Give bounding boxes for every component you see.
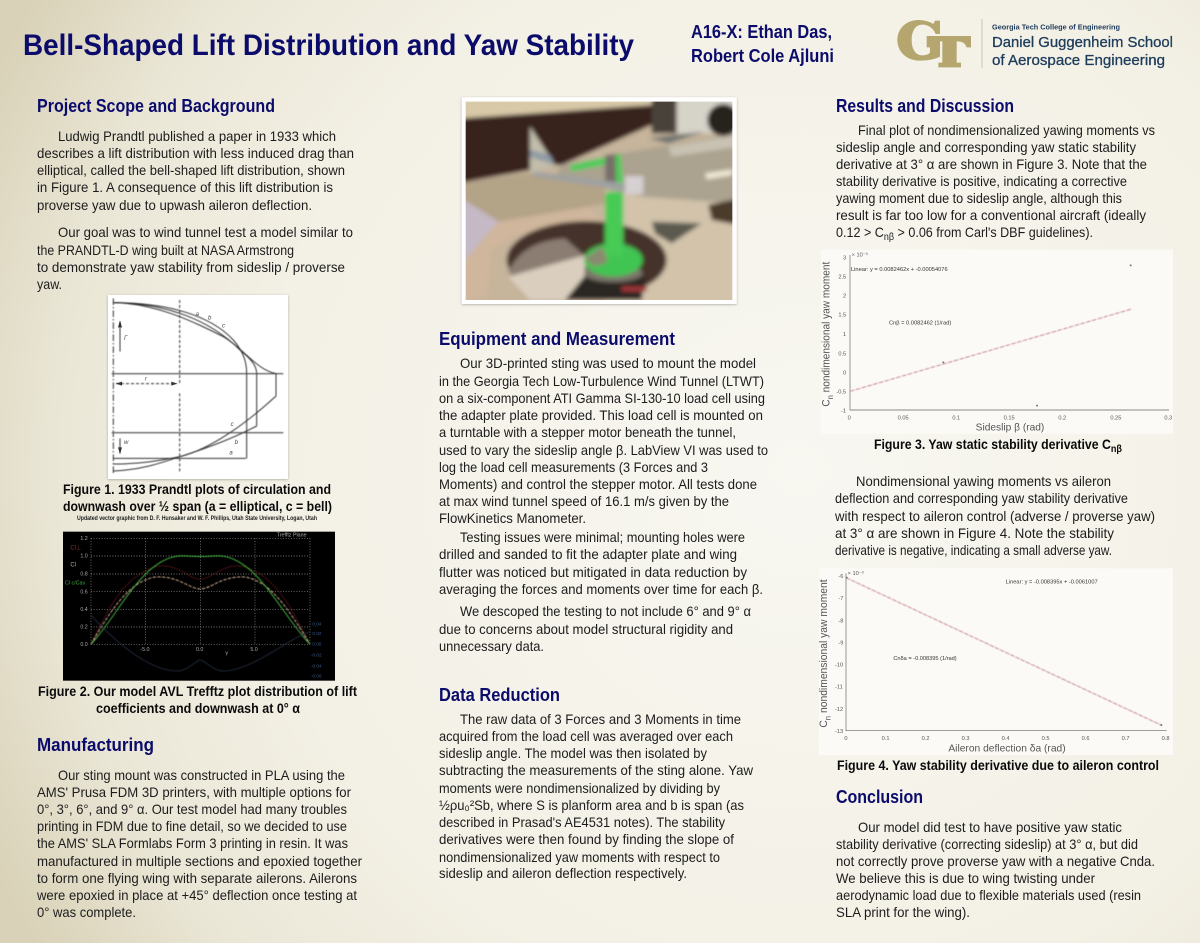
text block: aileron discussion: deflection and corresponding yaw stability derivative	[835, 490, 1128, 506]
figure 2: AVL Trefftz plot: 0.0	[80, 642, 88, 648]
chart: figure 4 yaw moment vs aileron deflection: -7	[838, 596, 843, 602]
text block: data reduction: sideslip angle. The model was then isolated by	[439, 745, 707, 761]
text block: manufacturing: Our sting mount was constructed in PLA using the	[58, 767, 345, 783]
logo: Georgia Tech Daniel Guggenheim School of Aerospace Engineering: Daniel Guggenheim School	[992, 34, 1173, 51]
figure 2: AVL Trefftz plot: 0.04	[312, 621, 322, 626]
text block: results and discussion: 0.12 > C	[836, 224, 889, 240]
heading: Results and Discussion: Results and Discussion	[836, 96, 1014, 116]
figure 2: AVL Trefftz plot: 0.4	[80, 607, 88, 613]
text block: project scope: in Figure 1. A consequence of this lift distribution is	[37, 179, 333, 195]
text block: aileron discussion	[834, 473, 1155, 558]
text block: data reduction: subtracting the measurements of the sting alone. Yaw	[439, 762, 754, 778]
text block: aileron discussion: derivative is negative, indicating a small adverse yaw.	[835, 542, 1112, 558]
title: Bell-Shaped Lift Distribution and Yaw Stability	[23, 29, 634, 62]
figure 1: Prandtl circulation and downwash plots: c	[231, 422, 234, 428]
text block: aileron discussion: Nondimensional yawing moments vs aileron	[856, 473, 1111, 489]
chart: figure 4 yaw moment vs aileron deflection: 0.2	[922, 736, 930, 742]
text block: project scope	[37, 128, 354, 292]
chart: figure 4 yaw moment vs aileron deflection: n	[823, 716, 832, 720]
text block: equipment and measurement: the adapter plate provided. This load cell is mounted on	[439, 407, 763, 423]
chart: figure 3 yaw moment vs sideslip: Sideslip β (rad)	[976, 422, 1044, 433]
figure 2: AVL Trefftz plot: -0.06	[311, 674, 322, 679]
logo: Georgia Tech Daniel Guggenheim School of Aerospace Engineering	[897, 19, 1173, 69]
text block: results and discussion: > 0.06 from Carl's DBF guidelines).	[894, 224, 1093, 240]
text block: results and discussion: derivative at 3° α are shown in Figure 3. Note that the	[836, 156, 1147, 172]
chart: figure 3 yaw moment vs sideslip: × 10⁻³	[852, 252, 868, 258]
text block: equipment and measurement: drilled and sanded to fit the adapter plate and wing	[439, 546, 737, 562]
caption: figure 2	[38, 684, 357, 716]
photo: wind tunnel model on green sting	[462, 97, 739, 305]
figure 2: AVL Trefftz plot: -0.04	[311, 663, 322, 668]
figure 2: AVL Trefftz plot: 1.0	[80, 554, 88, 560]
text block: conclusion: We believe this is due to wing twisting under	[836, 870, 1095, 886]
chart: figure 3 yaw moment vs sideslip: 1.5	[838, 313, 846, 319]
chart: figure 3 yaw moment vs sideslip: Cnβ = 0.0082462 (1/rad)	[889, 320, 952, 326]
text block: equipment and measurement: Moments) and control the stepper motor. All tests done	[439, 476, 757, 492]
figure 2: AVL Trefftz plot: -0.02	[311, 652, 322, 657]
chart: figure 3 yaw moment vs sideslip: 0.3	[1164, 416, 1172, 422]
chart: figure 4 yaw moment vs aileron deflection: Linear: y = -0.008395x + -0.0061007	[1006, 580, 1098, 586]
figure 2: AVL Trefftz plot: 1.2	[80, 536, 88, 542]
text block: results and discussion: nβ	[884, 232, 894, 243]
text block: equipment and measurement: averaging the forces and moments over time for each β.	[439, 581, 763, 597]
text block: project scope: yaw.	[37, 276, 62, 292]
chart: figure 4 yaw moment vs aileron deflection: 0.4	[1002, 736, 1010, 742]
chart: figure 4 yaw moment vs aileron deflection: 0.3	[962, 736, 970, 742]
text block: manufacturing: to form one flying wing with separate ailerons. Ailerons	[37, 870, 357, 886]
chart: figure 4 yaw moment vs aileron deflection: Aileron deflection δa (rad)	[948, 744, 1066, 755]
caption: figure 2: Figure 2. Our model AVL Trefftz plot distribution of lift	[38, 684, 357, 699]
caption: figure 3: Figure 3. Yaw static stability derivative C	[874, 437, 1134, 452]
text block: data reduction: sideslip and aileron deflection respectively.	[439, 865, 687, 881]
text block: data reduction: moments were nondimensionalized by dividing by	[439, 780, 720, 796]
figure 1: Prandtl circulation and downwash plots: r	[145, 377, 148, 383]
text block: results and discussion: result is far too low for a conventional aircraft (ideally	[836, 207, 1146, 223]
chart: figure 3 yaw moment vs sideslip	[821, 250, 1173, 434]
chart: figure 3 yaw moment vs sideslip: 0.5	[838, 351, 846, 357]
figure 2: AVL Trefftz plot	[63, 532, 335, 681]
text block: equipment and measurement: flutter was noticed but mitigated in data reduction by	[439, 564, 747, 580]
figure 1: Prandtl circulation and downwash plots: b	[235, 440, 239, 446]
chart: figure 4 yaw moment vs aileron deflection: 0.7	[1122, 736, 1130, 742]
authors	[691, 22, 834, 66]
figure 2: AVL Trefftz plot: Cl⊥	[70, 545, 81, 552]
text block: results and discussion: sideslip angle and corresponding yaw static stability	[836, 139, 1136, 155]
figure 2: AVL Trefftz plot: -5.0	[140, 647, 150, 653]
figure 1: Prandtl circulation and downwash plots: c	[222, 323, 225, 329]
text block: project scope: the PRANDTL-D wing built at NASA Armstrong	[37, 242, 294, 258]
chart: figure 3 yaw moment vs sideslip: -0.5	[836, 389, 846, 395]
figure 2: AVL Trefftz plot: 0.8	[80, 572, 88, 578]
text block: project scope: to demonstrate yaw stability from sideslip / proverse	[37, 259, 345, 275]
chart: figure 3 yaw moment vs sideslip: 0	[848, 416, 851, 422]
authors: A16-X: Ethan Das,	[691, 22, 832, 42]
text block: conclusion: SLA print for the wing).	[836, 904, 970, 920]
chart: figure 4 yaw moment vs aileron deflection: -11	[835, 685, 843, 691]
text block: project scope: describes a lift distribution with less induced drag than	[37, 145, 354, 161]
chart: figure 4 yaw moment vs aileron deflection: C	[818, 720, 830, 728]
chart: figure 4 yaw moment vs aileron deflection: Cnδa = -0.008395 (1/rad)	[893, 656, 957, 662]
figure 1: Prandtl circulation and downwash plots: Γ	[124, 336, 128, 342]
heading: Conclusion: Conclusion	[836, 787, 923, 807]
text block: equipment and measurement: due to concerns about model structural rigidity and	[439, 621, 733, 637]
chart: figure 4 yaw moment vs aileron deflection: -10	[835, 663, 843, 669]
authors: Robert Cole Ajluni	[691, 46, 834, 66]
logo: Georgia Tech Daniel Guggenheim School of Aerospace Engineering: Georgia Tech College of Engineering	[992, 22, 1120, 32]
text block: results and discussion: stability derivative is positive, indicating a corrective	[836, 173, 1127, 189]
text block: equipment and measurement: a turntable with a stepper motor beneath the tunnel,	[439, 424, 736, 440]
figure 1: Prandtl circulation and downwash plots: a	[229, 451, 233, 457]
figure 2: AVL Trefftz plot: Y	[225, 652, 229, 658]
icon: GT monogram	[897, 20, 971, 67]
text block: manufacturing: printing in FDM due to fine detail, so we decided to use	[37, 818, 347, 834]
text block: equipment and measurement: Our 3D-printed sting was used to mount the model	[460, 355, 756, 371]
text block: data reduction: described in Prasad's AE4531 notes). The stability	[439, 814, 725, 830]
chart: figure 4 yaw moment vs aileron deflection: -8	[838, 618, 843, 624]
text block: results and discussion	[836, 122, 1155, 243]
text block: conclusion	[836, 819, 1155, 920]
text block: data reduction: derivatives were then found by finding the slope of	[439, 831, 734, 847]
chart: figure 3 yaw moment vs sideslip: C	[821, 399, 833, 407]
text block: aileron discussion: at 3° α are shown in Figure 4. Note the stability	[835, 525, 1114, 541]
caption: figure 4: Figure 4. Yaw stability derivative due to aileron control	[837, 758, 1159, 773]
text block: equipment and measurement: Testing issues were minimal; mounting holes were	[460, 529, 745, 545]
chart: figure 4 yaw moment vs aileron deflection: -9	[838, 640, 843, 646]
text block: equipment and measurement: unnecessary data.	[439, 638, 544, 654]
text block: equipment and measurement: in the Georgia Tech Low-Turbulence Wind Tunnel (LTWT)	[439, 373, 764, 389]
caption: figure 1: Figure 1. 1933 Prandtl plots of circulation and	[63, 482, 331, 497]
chart: figure 3 yaw moment vs sideslip: 2	[843, 293, 846, 299]
text block: manufacturing: were epoxied in place at +45° deflection once testing at	[36, 887, 357, 903]
figure 1: Prandtl circulation and downwash plots: a	[196, 312, 200, 318]
figure 2: AVL Trefftz plot: 5.0	[250, 647, 258, 653]
figure 1: Prandtl circulation and downwash plots	[108, 295, 288, 479]
chart: figure 3 yaw moment vs sideslip: 1	[843, 332, 846, 338]
chart: figure 4 yaw moment vs aileron deflection: 0.1	[882, 736, 890, 742]
caption: figure 1: Updated vector graphic from D. F. Hunsaker and W. F. Phillips, Utah State University, Logan, Utah	[77, 516, 317, 522]
text block: data reduction: acquired from the load cell was averaged over each	[439, 728, 733, 744]
chart: figure 4 yaw moment vs aileron deflection: 0.8	[1162, 736, 1170, 742]
chart: figure 3 yaw moment vs sideslip: 0.2	[1058, 416, 1066, 422]
text block: conclusion: Our model did test to have positive yaw static	[858, 819, 1122, 835]
text block: data reduction: ½ρu₀²Sb, where S is planform area and b is span (as	[439, 797, 744, 813]
text block: data reduction: The raw data of 3 Forces and 3 Moments in time	[460, 711, 741, 727]
chart: figure 3 yaw moment vs sideslip: 0	[843, 370, 846, 376]
caption: figure 2: coefficients and downwash at 0° α	[96, 701, 301, 716]
figure 2: AVL Trefftz plot: 0.2	[80, 625, 88, 631]
text block: manufacturing	[36, 767, 362, 920]
chart: figure 4 yaw moment vs aileron deflection: 0	[844, 736, 847, 742]
chart: figure 3 yaw moment vs sideslip: -1	[841, 408, 846, 414]
heading: Equipment and Measurement: Equipment and Measurement	[439, 329, 675, 349]
text block: manufacturing: the AMS' SLA Formlabs Form 3 printing in resin. It was	[37, 835, 348, 851]
logo: Georgia Tech Daniel Guggenheim School of Aerospace Engineering: of Aerospace Engineering	[992, 52, 1165, 69]
chart: figure 3 yaw moment vs sideslip: 0.05	[898, 416, 909, 422]
text block: results and discussion: Final plot of nondimensionalized yawing moments vs	[858, 122, 1155, 138]
text block: equipment and measurement: on a six-component ATI Gamma SI-130-10 load cell using	[439, 390, 765, 406]
text block: project scope: Our goal was to wind tunnel test a model similar to	[58, 224, 353, 240]
chart: figure 4 yaw moment vs aileron deflection: 0.6	[1082, 736, 1090, 742]
figure 2: AVL Trefftz plot: 0.00	[312, 642, 322, 647]
caption: figure 1	[63, 482, 332, 522]
heading: Manufacturing: Manufacturing	[37, 735, 154, 755]
heading: Project Scope and Background: Project Scope and Background	[37, 96, 275, 116]
chart: figure 4 yaw moment vs aileron deflection: -6	[838, 574, 843, 580]
heading: Data Reduction: Data Reduction	[439, 685, 560, 705]
text block: equipment and measurement	[439, 355, 768, 654]
text block: aileron discussion: with respect to aileron control (adverse / proverse yaw)	[834, 508, 1155, 524]
figure 2: AVL Trefftz plot: Trefftz Plane	[277, 532, 307, 538]
text block: equipment and measurement: FlowKinetics Manometer.	[439, 510, 586, 526]
text block: manufacturing: 0°, 3°, 6°, and 9° α. Our test model had many troubles	[37, 801, 347, 817]
text block: conclusion: aerodynamic load due to flexible materials used (resin	[836, 887, 1141, 903]
chart: figure 3 yaw moment vs sideslip: 3	[843, 255, 846, 261]
chart: figure 4 yaw moment vs aileron deflection: 0.5	[1042, 736, 1050, 742]
text block: project scope: Ludwig Prandtl published a paper in 1933 which	[58, 128, 336, 144]
figure 2: AVL Trefftz plot: 0.6	[80, 589, 88, 595]
figure 1: Prandtl circulation and downwash plots: b	[208, 315, 212, 321]
text block: manufacturing: AMS' Prusa FDM 3D printers, with multiple options for	[37, 784, 351, 800]
chart: figure 4 yaw moment vs aileron deflection	[818, 568, 1173, 755]
chart: figure 3 yaw moment vs sideslip: nondimensional yaw moment	[821, 262, 833, 395]
chart: figure 3 yaw moment vs sideslip: n	[826, 395, 835, 399]
text block: project scope: elliptical, called the bell-shaped lift distribution, shown	[37, 162, 345, 178]
text block: conclusion: stability derivative (correcting sideslip) at 3° α, but did	[836, 836, 1138, 852]
text block: equipment and measurement: at max wind tunnel speed of 16.1 m/s given by the	[439, 493, 729, 509]
chart: figure 4 yaw moment vs aileron deflection: nondimensional yaw moment	[818, 579, 830, 716]
chart: figure 3 yaw moment vs sideslip: 2.5	[838, 275, 846, 281]
figure 2: AVL Trefftz plot: Cl c/Cav	[65, 580, 85, 586]
text block: data reduction: nondimensionalized yaw moments with respect to	[439, 849, 720, 865]
text block: results and discussion: yawing moment due to sideslip angle, although this	[836, 190, 1122, 206]
figure 1: Prandtl circulation and downwash plots: w	[124, 440, 129, 446]
text block: project scope: proverse yaw due to upwash aileron deflection.	[37, 197, 312, 213]
text block: equipment and measurement: used to vary the sideslip angle β. LabView VI was used to	[439, 442, 768, 458]
text block: data reduction	[439, 711, 754, 881]
figure 2: AVL Trefftz plot: 0.0	[196, 647, 203, 653]
chart: figure 3 yaw moment vs sideslip: Linear: y = 0.0082462x + -0.00054076	[851, 267, 948, 273]
text block: equipment and measurement: log the load cell measurements (3 Forces and 3	[439, 459, 708, 475]
chart: figure 4 yaw moment vs aileron deflection: -13	[835, 729, 843, 735]
figure 2: AVL Trefftz plot: 0.02	[312, 631, 322, 636]
chart: figure 3 yaw moment vs sideslip: 0.25	[1110, 416, 1121, 422]
chart: figure 3 yaw moment vs sideslip: 0.1	[952, 416, 960, 422]
caption: figure 1: downwash over ½ span (a = elliptical, c = bell)	[63, 499, 332, 514]
text block: conclusion: not correctly prove proverse yaw with a negative Cnda.	[836, 853, 1155, 869]
text block: manufacturing: manufactured in multiple sections and epoxied together	[37, 853, 362, 869]
chart: figure 4 yaw moment vs aileron deflection: × 10⁻³	[848, 571, 864, 577]
text block: manufacturing: 0° was complete.	[37, 904, 136, 920]
caption: figure 3: nβ	[1111, 444, 1122, 455]
text block: equipment and measurement: We descoped the testing to not include 6° and 9° α	[460, 603, 751, 619]
chart: figure 3 yaw moment vs sideslip: 0.15	[1004, 416, 1015, 422]
chart: figure 4 yaw moment vs aileron deflection: -12	[835, 707, 843, 713]
figure 2: AVL Trefftz plot: Cl	[70, 563, 76, 569]
